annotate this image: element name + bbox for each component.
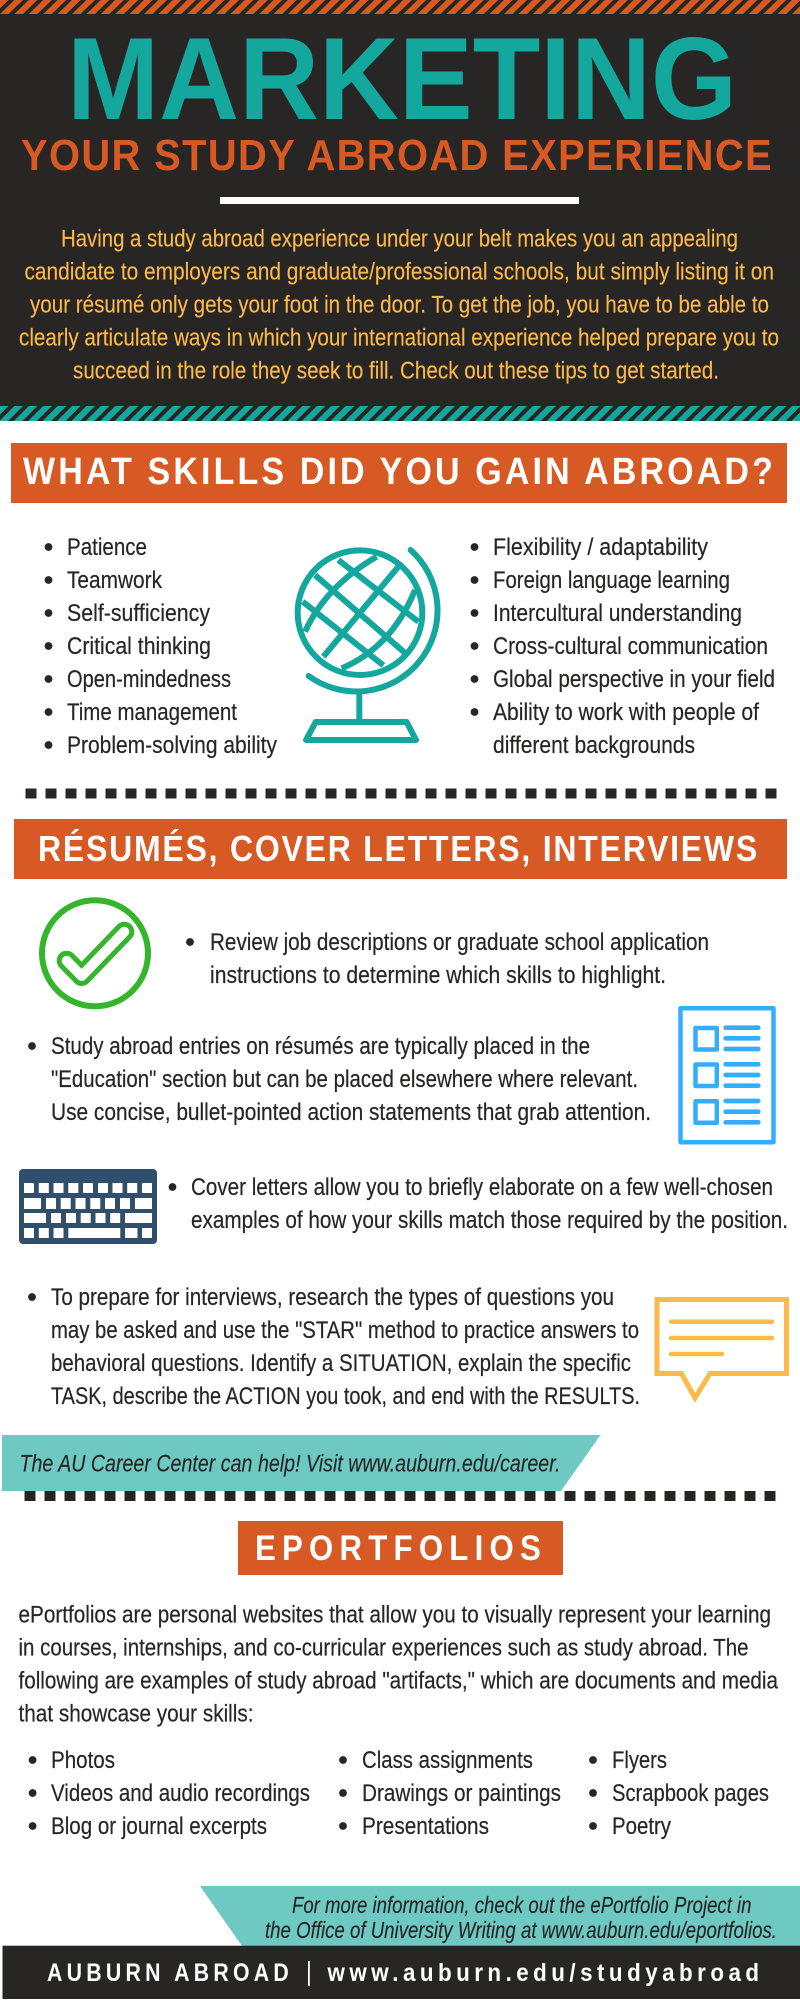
- artifacts list: column three: Flyers: [612, 1747, 667, 1774]
- footer bar: [2, 1946, 800, 1999]
- skills list: right column: Intercultural understanding: [493, 600, 742, 627]
- tip: interviews: TASK, describe the ACTION you took, and end with the RESULTS.: [51, 1383, 640, 1410]
- artifacts list: column one: Blog or journal excerpts: [51, 1813, 267, 1840]
- footer bar: AUBURN ABROAD: [47, 1959, 293, 1987]
- artifacts list: column two: Presentations: [362, 1813, 489, 1840]
- tip: cover letters: [169, 1174, 788, 1234]
- header panel: [0, 0, 800, 421]
- skills list: right column: different backgrounds: [493, 732, 695, 759]
- section heading: eportfolios: EPORTFOLIOS: [255, 1529, 547, 1568]
- artifacts list: column one: Videos and audio recordings: [51, 1780, 310, 1807]
- skills list: left column: [45, 534, 277, 759]
- tip: review descriptions: Review job descriptions or graduate school application: [210, 929, 709, 956]
- white divider bar: [220, 197, 579, 204]
- icon: blue document: [680, 1008, 774, 1142]
- callout: career center: [2, 1435, 600, 1491]
- dotted divider: [24, 1491, 776, 1501]
- skills list: left column: Patience: [67, 534, 147, 561]
- icon: green check mark: [42, 900, 148, 1006]
- skills list: right column: Foreign language learning: [493, 567, 730, 594]
- artifacts list: column three: [589, 1747, 769, 1840]
- tip: resume entries: "Education" section but can be placed elsewhere where relevant.: [51, 1066, 638, 1093]
- skills list: right column: Flexibility / adaptability: [493, 534, 708, 561]
- eportfolios paragraph: [18, 1602, 779, 1728]
- tip: interviews: behavioral questions. Identify a SITUATION, explain the specific: [51, 1350, 631, 1377]
- artifacts list: column two: Drawings or paintings: [362, 1780, 561, 1807]
- section heading: skills: [11, 443, 787, 503]
- callout: eportfolio project: [200, 1886, 800, 1946]
- tip: resume entries: [28, 1033, 651, 1126]
- intro paragraph: [19, 226, 779, 384]
- skills list: right column: [471, 534, 775, 759]
- skills list: left column: Open-mindedness: [67, 666, 231, 693]
- orange hatched stripe: [0, 0, 800, 14]
- artifacts list: column two: [339, 1747, 561, 1840]
- section heading: eportfolios: [238, 1521, 563, 1575]
- title: MARKETING: [67, 13, 737, 144]
- artifacts list: column two: Class assignments: [362, 1747, 533, 1774]
- icon: speech bubble: [657, 1300, 786, 1398]
- skills list: left column: Teamwork: [67, 567, 163, 594]
- section heading: resumes: [14, 819, 787, 879]
- artifacts list: column three: Poetry: [612, 1813, 671, 1840]
- tip: interviews: [28, 1284, 640, 1410]
- artifacts list: column one: [29, 1747, 310, 1840]
- icon: globe: [298, 550, 438, 740]
- skills list: right column: Ability to work with people of: [493, 699, 759, 726]
- artifacts list: column three: Scrapbook pages: [612, 1780, 769, 1807]
- tip: resume entries: Use concise, bullet-pointed action statements that grab attention.: [51, 1099, 651, 1126]
- icon: keyboard: [19, 1169, 157, 1244]
- artifacts list: column one: Photos: [51, 1747, 115, 1774]
- tip: interviews: may be asked and use the "STAR" method to practice answers to: [51, 1317, 639, 1344]
- skills list: right column: Cross-cultural communication: [493, 633, 768, 660]
- tip: resume entries: Study abroad entries on résumés are typically placed in the: [51, 1033, 590, 1060]
- callout: career center: The AU Career Center can help! Visit www.auburn.edu/career.: [20, 1451, 560, 1478]
- dotted divider: [26, 788, 777, 798]
- tip: review descriptions: instructions to determine which skills to highlight.: [210, 962, 666, 989]
- skills list: left column: Time management: [67, 699, 237, 726]
- tip: interviews: To prepare for interviews, research the types of questions you: [51, 1284, 614, 1311]
- tip: review descriptions: [186, 929, 709, 989]
- skills list: left column: Self-sufficiency: [67, 600, 210, 627]
- skills list: left column: Problem-solving ability: [67, 732, 277, 759]
- teal hatched stripe: [0, 406, 800, 421]
- eportfolios paragraph: that showcase your skills:: [18, 1701, 254, 1728]
- skills list: left column: Critical thinking: [67, 633, 211, 660]
